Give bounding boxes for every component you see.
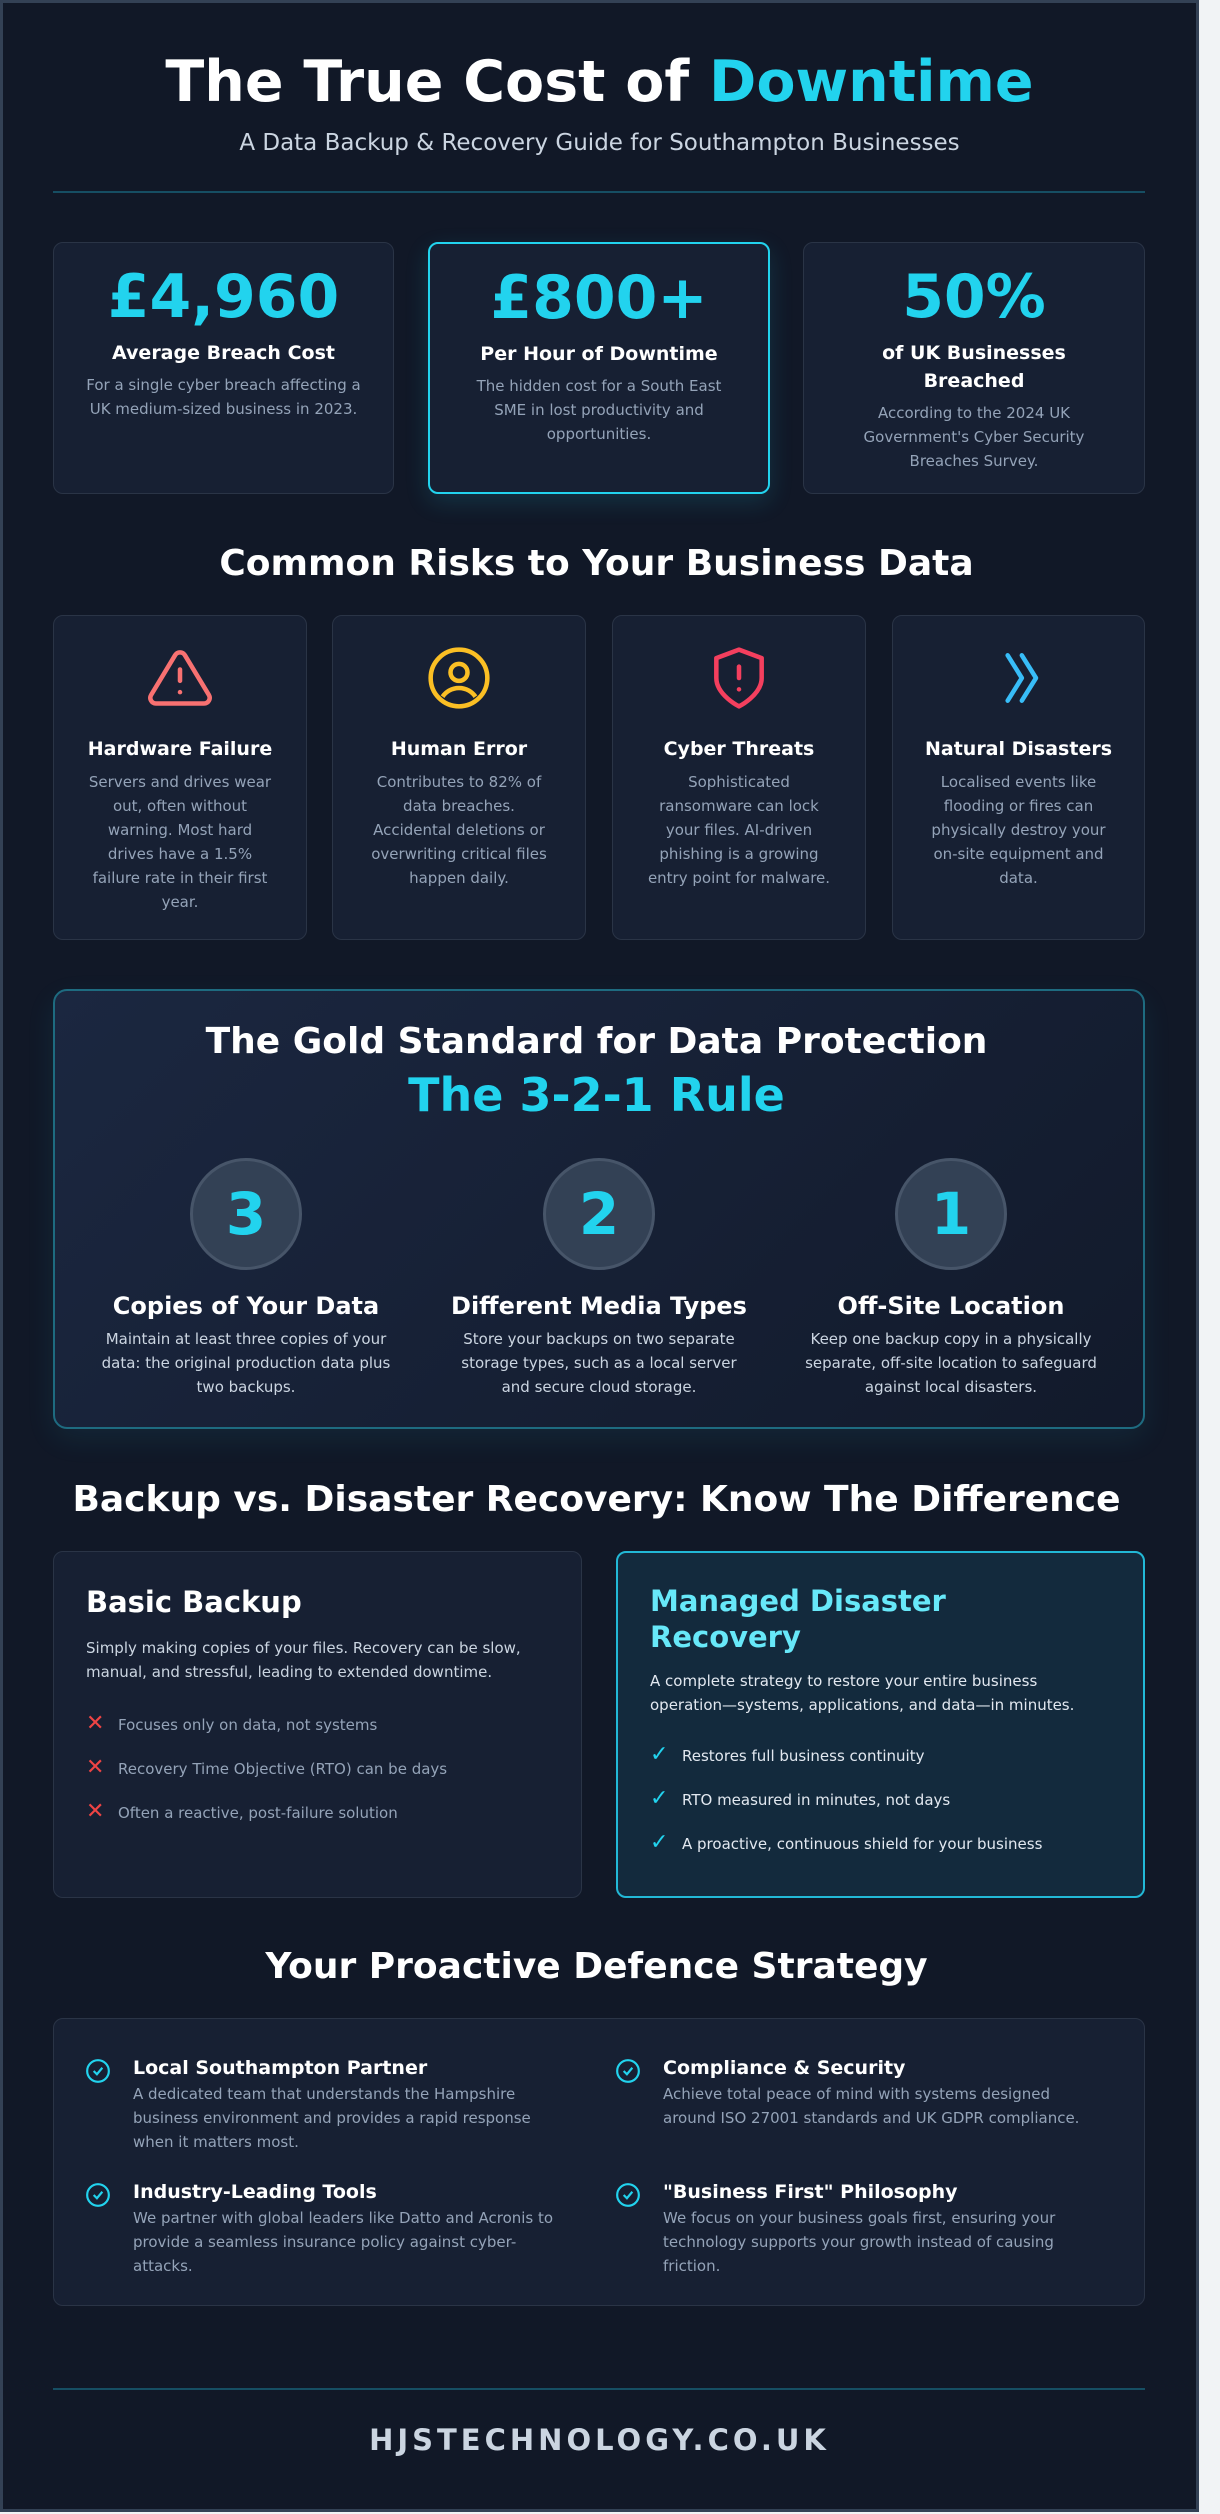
risk: hardware: Servers and drives wear out, often without warning. Most hard drives have a 1.5% failure rate in their first year. — [89, 773, 271, 911]
icon: shield — [714, 647, 764, 709]
panel: managed DR: Managed Disaster Recovery — [650, 1584, 946, 1654]
stat card: per hour — [428, 242, 770, 494]
step 2: Different Media Types — [451, 1292, 747, 1320]
risk: natural: Natural Disasters — [925, 738, 1112, 760]
feature: tools — [86, 2181, 553, 2275]
panel: managed DR: A complete strategy to restore your entire business operation—systems, applications, and data—in minutes. — [650, 1672, 1074, 1714]
risk: human: Contributes to 82% of data breaches. Accidental deletions or overwriting critical files happen daily. — [371, 773, 547, 887]
panel: managed DR — [616, 1551, 1145, 1898]
stat card: 50%: of UK Businesses Breached — [882, 342, 1066, 392]
feature: local: A dedicated team that understands the Hampshire business environment and provides a rapid response when it matters most. — [133, 2085, 531, 2151]
panel: basic backup: Simply making copies of your files. Recovery can be slow, manual, and stressful, leading to extended downtime. — [86, 1639, 521, 1681]
panel: basic backup: ✕ — [86, 1711, 104, 1736]
risk: hardware — [53, 615, 307, 940]
panel: basic backup — [53, 1551, 582, 1898]
step 3 — [102, 1158, 390, 1396]
icon: user — [428, 647, 490, 709]
feature: business first — [616, 2181, 1056, 2275]
risk: cyber: Cyber Threats — [664, 738, 814, 760]
panel: basic backup: Basic Backup — [86, 1585, 302, 1619]
risk: natural: Localised events like flooding or fires can physically destroy your on-site equipment and data. — [931, 773, 1106, 887]
step 1: Keep one backup copy in a physically separate, off-site location to safeguard against local disasters. — [805, 1330, 1097, 1396]
heading: common risks: Common Risks to Your Business Data — [219, 543, 974, 584]
icon: warning — [148, 650, 212, 706]
feature: compliance — [616, 2057, 1079, 2127]
panel: defence — [53, 2018, 1145, 2306]
risk: cyber: Sophisticated ransomware can lock your files. AI-driven phishing is a growing entry point for malware. — [648, 773, 830, 887]
stat card: 50%: 50% — [902, 262, 1046, 332]
step 2: 2 — [579, 1180, 619, 1248]
risk: cyber — [612, 615, 866, 940]
step 1 — [805, 1158, 1097, 1396]
risk: human: Human Error — [391, 738, 527, 760]
panel: basic backup: ✕ — [86, 1799, 104, 1824]
feature: business first: "Business First" Philosophy — [663, 2181, 958, 2203]
icon: chevrons — [1005, 653, 1038, 703]
feature: local — [86, 2057, 531, 2151]
feature: compliance: Compliance & Security — [663, 2057, 905, 2079]
risk: human — [332, 615, 586, 940]
title: The True Cost of Downtime — [165, 49, 1034, 115]
stat card: breach cost: For a single cyber breach affecting a UK medium-sized business in 2023. — [86, 376, 361, 418]
stat card: 50%: According to the 2024 UK Government's Cyber Security Breaches Survey. — [864, 404, 1084, 470]
heading: 3-2-1: The 3-2-1 Rule — [408, 1068, 785, 1122]
step 2 — [451, 1158, 747, 1396]
stat card: per hour: The hidden cost for a South East SME in lost productivity and opportunities. — [477, 377, 721, 443]
heading: defence: Your Proactive Defence Strategy — [265, 1946, 928, 1987]
panel: managed DR: ✓ — [650, 1786, 668, 1811]
step 1: 1 — [931, 1180, 971, 1248]
panel: basic backup: Focuses only on data, not systems — [118, 1716, 377, 1734]
stat card: per hour: Per Hour of Downtime — [480, 343, 718, 365]
panel: managed DR: A proactive, continuous shield for your business — [682, 1835, 1042, 1853]
heading: backup vs dr: Backup vs. Disaster Recovery: Know The Difference — [72, 1479, 1121, 1520]
panel: managed DR: ✓ — [650, 1830, 668, 1855]
stat card: breach cost — [53, 242, 394, 494]
stat card: per hour: £800+ — [490, 263, 708, 333]
step 3: Maintain at least three copies of your data: the original production data plus two backups. — [102, 1330, 390, 1396]
risk: natural — [892, 615, 1145, 940]
feature: local: Local Southampton Partner — [133, 2057, 427, 2079]
feature: business first: We focus on your business goals first, ensuring your technology supports your growth instead of causing friction. — [663, 2209, 1055, 2275]
step 3: 3 — [226, 1180, 266, 1248]
feature: tools: We partner with global leaders like Datto and Acronis to provide a seamless insurance policy against cyber-attacks. — [133, 2209, 553, 2275]
step 2: Store your backups on two separate storage types, such as a local server and secure cloud storage. — [461, 1330, 737, 1396]
panel: managed DR: RTO measured in minutes, not days — [682, 1791, 950, 1809]
stat card: breach cost: £4,960 — [108, 262, 339, 332]
footer: HJSTECHNOLOGY.CO.UK — [369, 2423, 830, 2457]
panel: basic backup: Recovery Time Objective (RTO) can be days — [118, 1760, 447, 1778]
panel: managed DR: ✓ — [650, 1742, 668, 1767]
step 3: Copies of Your Data — [113, 1292, 379, 1320]
panel: basic backup: ✕ — [86, 1755, 104, 1780]
feature: tools: Industry-Leading Tools — [133, 2181, 377, 2203]
subtitle: A Data Backup & Recovery Guide for Southampton Businesses — [239, 130, 960, 156]
panel: managed DR: Restores full business continuity — [682, 1747, 924, 1765]
panel: 3-2-1 rule — [53, 989, 1145, 1429]
stat card: breach cost: Average Breach Cost — [112, 342, 335, 364]
risk: hardware: Hardware Failure — [88, 738, 272, 760]
feature: compliance: Achieve total peace of mind with systems designed around ISO 27001 standards and UK GDPR compliance. — [663, 2085, 1079, 2127]
step 1: Off-Site Location — [838, 1292, 1064, 1320]
heading: gold standard: The Gold Standard for Data Protection — [206, 1021, 987, 1062]
panel: basic backup: Often a reactive, post-failure solution — [118, 1804, 398, 1822]
stat card: 50% — [803, 242, 1145, 494]
